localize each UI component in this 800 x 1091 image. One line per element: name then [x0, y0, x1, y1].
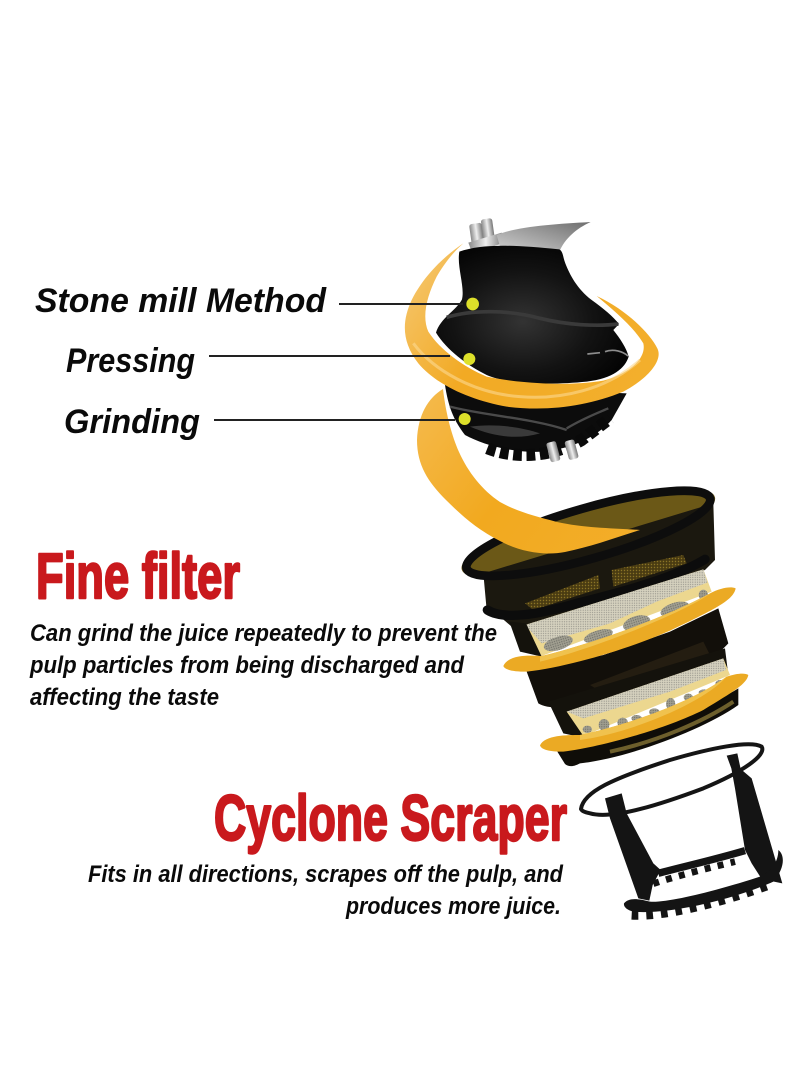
text block: scraper description — [88, 861, 564, 920]
text block: scraper description: Fits in all directions, scrapes off the pulp, and — [88, 861, 564, 888]
fine filter basket — [454, 470, 748, 766]
leader line: Pressing — [209, 355, 450, 357]
scraper left leg — [605, 793, 661, 901]
text block: fine filter description: pulp particles from being discharged and — [29, 652, 465, 679]
orange flange one — [503, 587, 736, 672]
upper dark mesh band — [483, 503, 715, 627]
scraper right leg — [727, 753, 782, 883]
scraper comb bar — [653, 851, 745, 884]
label: Grinding: Grinding — [64, 403, 200, 441]
mesh scallops lower — [583, 680, 725, 733]
scraper top ring — [581, 744, 762, 815]
auger head — [405, 218, 659, 463]
text block: fine filter description: affecting the taste — [30, 684, 219, 711]
top plate — [497, 222, 591, 252]
leader line: Grinding — [214, 419, 455, 421]
heading: Cyclone Scraper: Cyclone Scraper — [214, 782, 567, 854]
yellow dots — [459, 298, 479, 425]
filter top rim — [460, 474, 717, 593]
label: Stone mill Method: Stone mill Method — [35, 282, 327, 320]
text block: scraper description: produces more juice. — [345, 893, 561, 920]
lower auger with teeth — [445, 385, 627, 463]
lower juice ribbon — [417, 389, 640, 554]
lower dark band — [527, 608, 728, 708]
text block: fine filter description: Can grind the juice repeatedly to prevent the — [30, 620, 497, 647]
dark side upper — [509, 622, 542, 657]
label: Pressing: Pressing — [66, 342, 195, 380]
scraper bottom ring — [624, 850, 783, 915]
cyclone scraper — [581, 744, 783, 915]
orange flange two — [540, 674, 748, 752]
black auger body — [436, 246, 629, 384]
heading: Fine filter: Fine filter — [36, 540, 240, 612]
dark side lower — [548, 648, 728, 737]
groove highlight — [447, 312, 618, 325]
text block: fine filter description — [29, 620, 497, 711]
filter bottom — [557, 688, 738, 766]
upper mesh band — [525, 569, 712, 657]
upper flange ring — [487, 559, 705, 615]
mesh scallops upper — [542, 590, 708, 654]
lower mesh band — [567, 658, 730, 736]
upper juice ribbon — [405, 243, 659, 409]
filter inner back — [454, 470, 723, 597]
leader line: Stone mill Method — [339, 303, 463, 305]
icon: steel shaft top — [468, 218, 503, 252]
